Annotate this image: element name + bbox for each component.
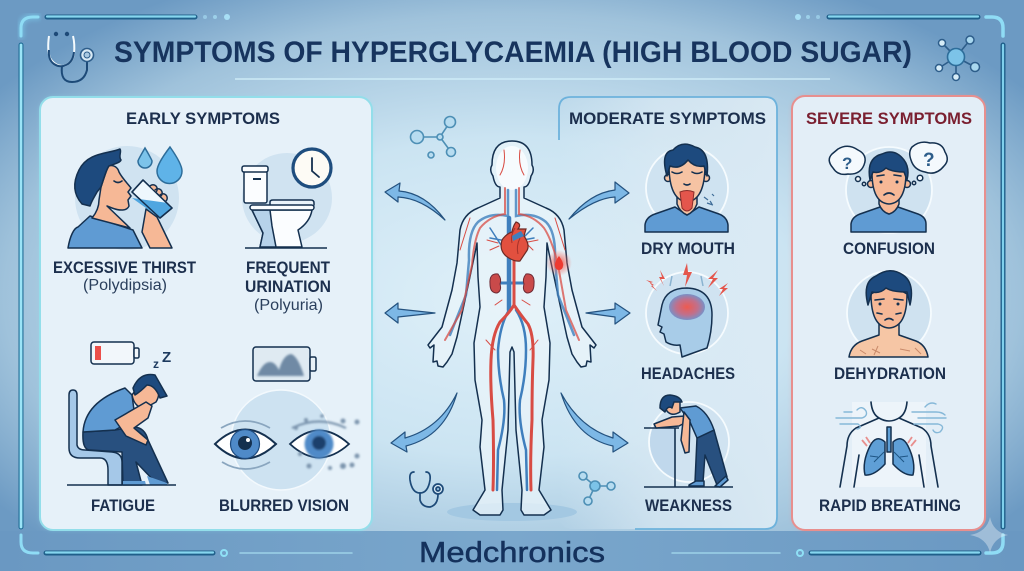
icon: rapid breathing	[836, 402, 946, 487]
label: polydipsia: (Polydipsia)	[83, 277, 167, 294]
label: dry mouth: DRY MOUTH	[641, 239, 735, 258]
label: fatigue: FATIGUE	[91, 496, 155, 515]
label: polyuria: (Polyuria)	[254, 297, 323, 314]
arrow: middle right	[586, 303, 630, 324]
icon: molecule bottom right	[579, 472, 615, 505]
icon: stethoscope bottom	[410, 472, 443, 507]
label: rapid breathing: RAPID BREATHING	[819, 496, 961, 515]
icon: kidneys	[490, 274, 534, 293]
icon: stethoscope header	[48, 32, 94, 82]
label: dehydration: DEHYDRATION	[834, 364, 946, 383]
icon: fatigue: Z	[162, 349, 171, 366]
body outline	[428, 141, 596, 515]
panel: early symptoms	[40, 97, 372, 530]
label: headaches: HEADACHES	[641, 364, 735, 383]
panel: moderate symptoms	[559, 97, 777, 529]
icon: dry mouth	[645, 144, 728, 232]
icon: body shadow	[447, 503, 577, 521]
icon: headaches	[646, 263, 728, 357]
icon: confusion	[829, 142, 947, 233]
footer band	[0, 531, 1024, 571]
label: confusion: CONFUSION	[843, 239, 935, 258]
icon: sparkle	[970, 517, 1008, 553]
icon: fatigue: z	[153, 357, 159, 371]
icon: frequent urination	[242, 149, 332, 248]
arrow: upper left	[385, 183, 445, 220]
icon: heart	[501, 222, 528, 261]
brand name: Medchronics	[419, 537, 605, 569]
arrow: lower left	[391, 393, 457, 452]
red arteries	[445, 150, 579, 490]
arrow: middle left	[385, 303, 435, 323]
icon: blurred vision	[215, 347, 360, 490]
icon: dehydration	[847, 271, 931, 357]
icon: confusion: ?	[842, 154, 852, 173]
panel: severe symptoms	[792, 96, 985, 530]
icon: weakness	[644, 395, 733, 487]
heading: severe symptoms: SEVERE SYMPTOMS	[806, 109, 972, 128]
icon: glowing arm spot	[546, 250, 572, 276]
arrow: upper right	[569, 182, 629, 219]
blue veins	[450, 190, 574, 490]
icon: fatigue	[67, 342, 176, 485]
label: frequent urination: URINATION	[245, 277, 331, 296]
title: SYMPTOMS OF HYPERGLYCAEMIA (HIGH BLOOD SUGAR)	[114, 36, 912, 69]
human body circulatory figure	[428, 141, 596, 515]
icon: excessive thirst	[68, 146, 182, 250]
icon: confusion: ?	[923, 150, 935, 171]
heading: moderate symptoms: MODERATE SYMPTOMS	[569, 109, 766, 128]
label: frequent urination	[245, 258, 331, 296]
label: excessive thirst: EXCESSIVE THIRST	[53, 258, 197, 277]
label: frequent urination: FREQUENT	[246, 258, 331, 277]
label: weakness: WEAKNESS	[645, 496, 732, 515]
label: blurred vision: BLURRED VISION	[219, 496, 349, 515]
arrow: lower right	[561, 393, 628, 452]
icon: molecule header	[936, 36, 980, 80]
icon: molecule top left	[410, 116, 456, 158]
heading: early symptoms: EARLY SYMPTOMS	[126, 109, 280, 128]
